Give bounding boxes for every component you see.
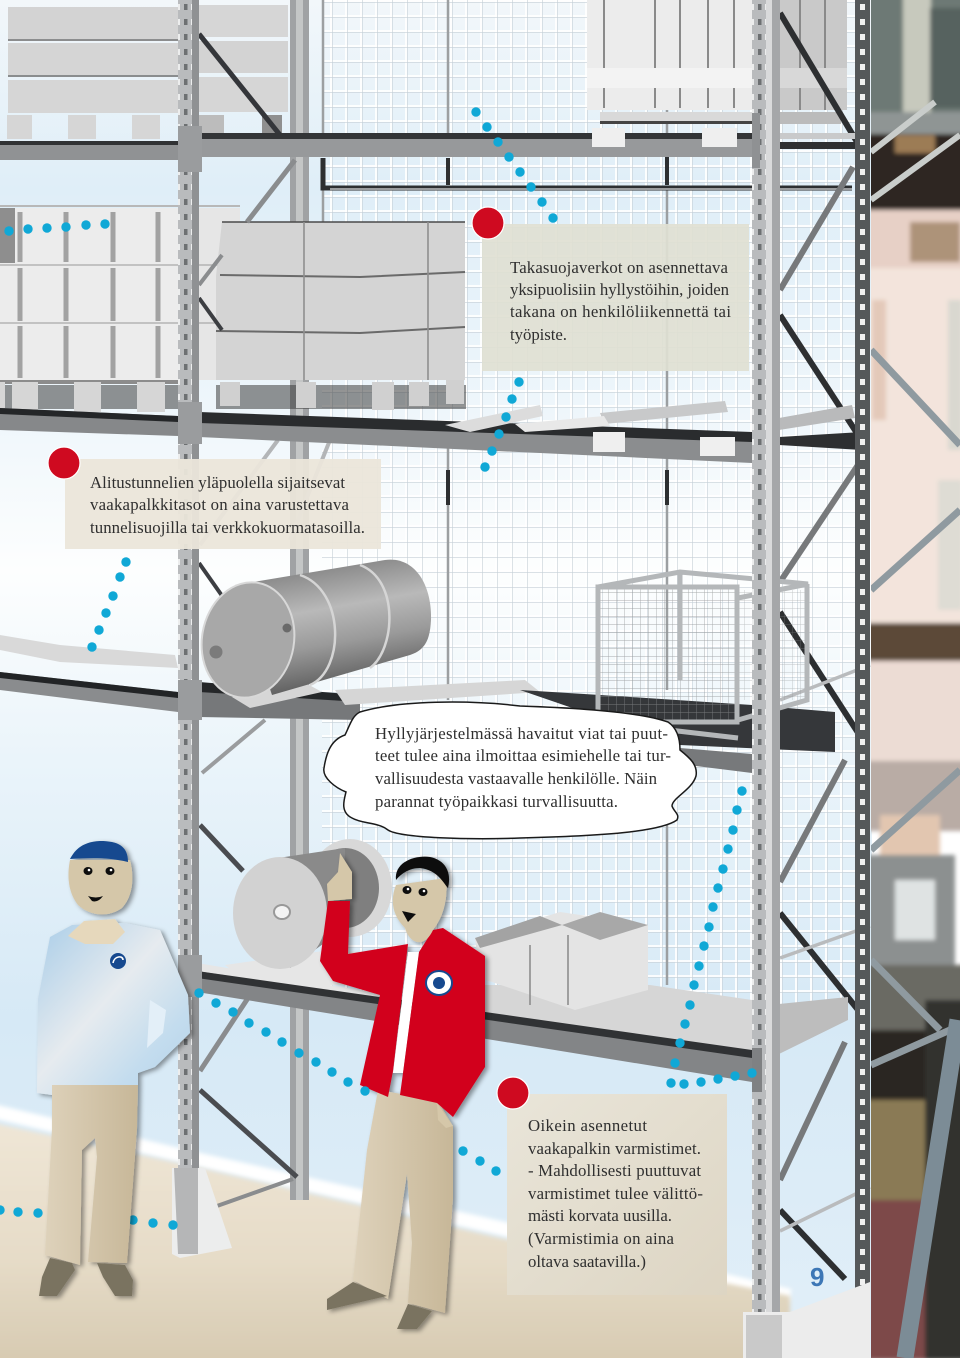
callout: tunnel protection note: tunnelisuojilla tai verkkokuormatasoilla. (90, 518, 365, 537)
callout: protective mesh note: työpiste. (510, 325, 567, 344)
dotted line: bottom centre (194, 988, 501, 1176)
third level shelf rails and beams (0, 635, 835, 773)
background: floor (0, 1108, 790, 1358)
top crate right (587, 0, 847, 124)
callout: protective mesh note: takana on henkilöliikennettä tai (510, 302, 731, 321)
callout: protective mesh note (482, 224, 749, 371)
dotted line: bottom left (0, 1205, 178, 1230)
boxes on shelf (475, 912, 648, 1010)
rack uprights (178, 0, 870, 1320)
callout: tunnel protection note: vaakapalkkitasot on aina varustettava (90, 495, 350, 514)
dotted line: top right (471, 107, 558, 223)
shelf deck (197, 963, 848, 1082)
dotted line: top left (4, 219, 110, 236)
second level pallets left (0, 206, 240, 412)
dotted line: right long (666, 786, 757, 1089)
speech bubble: Hyllyjärjestelmässä havaitut viat tai puut- (375, 724, 668, 743)
callout: beam locks note: - Mahdollisesti puuttuvat (528, 1161, 701, 1180)
marker: red dot top right (472, 207, 504, 239)
callout: beam locks note: (Varmistimia on aina (528, 1229, 675, 1248)
worker left: blue shirt (37, 841, 190, 1296)
wire cage (598, 572, 808, 738)
second level pallets centre (216, 222, 466, 410)
callout: beam locks note: oltava saatavilla.) (528, 1252, 646, 1271)
callout: beam locks note: vaakapalkin varmistimet. (528, 1139, 701, 1158)
back upright (290, 0, 309, 1200)
callout: beam locks note: varmistimet tulee välittö- (528, 1184, 703, 1203)
speech bubble: vallisuudesta vastaavalle henkilölle. Näin (375, 769, 658, 788)
cable reel (225, 839, 400, 985)
upright foot left (172, 1168, 232, 1258)
diagonal bracing right bay (780, 13, 870, 1279)
marker: red dot bottom (497, 1077, 529, 1109)
callout: protective mesh note: Takasuojaverkot on asennettava (510, 258, 729, 277)
drum on pallet (193, 560, 431, 708)
dotted line: centre (480, 377, 524, 472)
top shelf beams (0, 128, 870, 160)
photo strip: warehouse (865, 0, 960, 1358)
callout: protective mesh note: yksipuolisiin hyllystöihin, joiden (510, 280, 730, 299)
page number: 9 (810, 1262, 824, 1292)
speech bubble (324, 702, 696, 839)
diagonal bracing left bay (199, 34, 330, 1206)
top pallet stack left (7, 5, 288, 139)
dotted line: left middle (87, 557, 131, 652)
callout: tunnel protection note (65, 459, 381, 549)
dot on jacket edge (360, 1086, 370, 1096)
speech bubble: teet tulee aina ilmoittaa esimiehelle tai tur- (375, 746, 671, 765)
second shelf beams (0, 401, 862, 463)
background: wire mesh back panels (322, 0, 857, 1005)
callout: beam locks note: Oikein asennetut (528, 1116, 647, 1135)
worker right: red jacket (320, 853, 485, 1329)
upright foot right (743, 1282, 870, 1358)
speech bubble: parannat työpaikkasi turvallisuutta. (375, 792, 618, 811)
callout: tunnel protection note: Alitustunnelien yläpuolella sijaitsevat (90, 473, 345, 492)
callout: beam locks note: mästi korvata uusilla. (528, 1206, 672, 1225)
marker: red dot left (48, 447, 80, 479)
callout: beam locks note (507, 1094, 727, 1295)
